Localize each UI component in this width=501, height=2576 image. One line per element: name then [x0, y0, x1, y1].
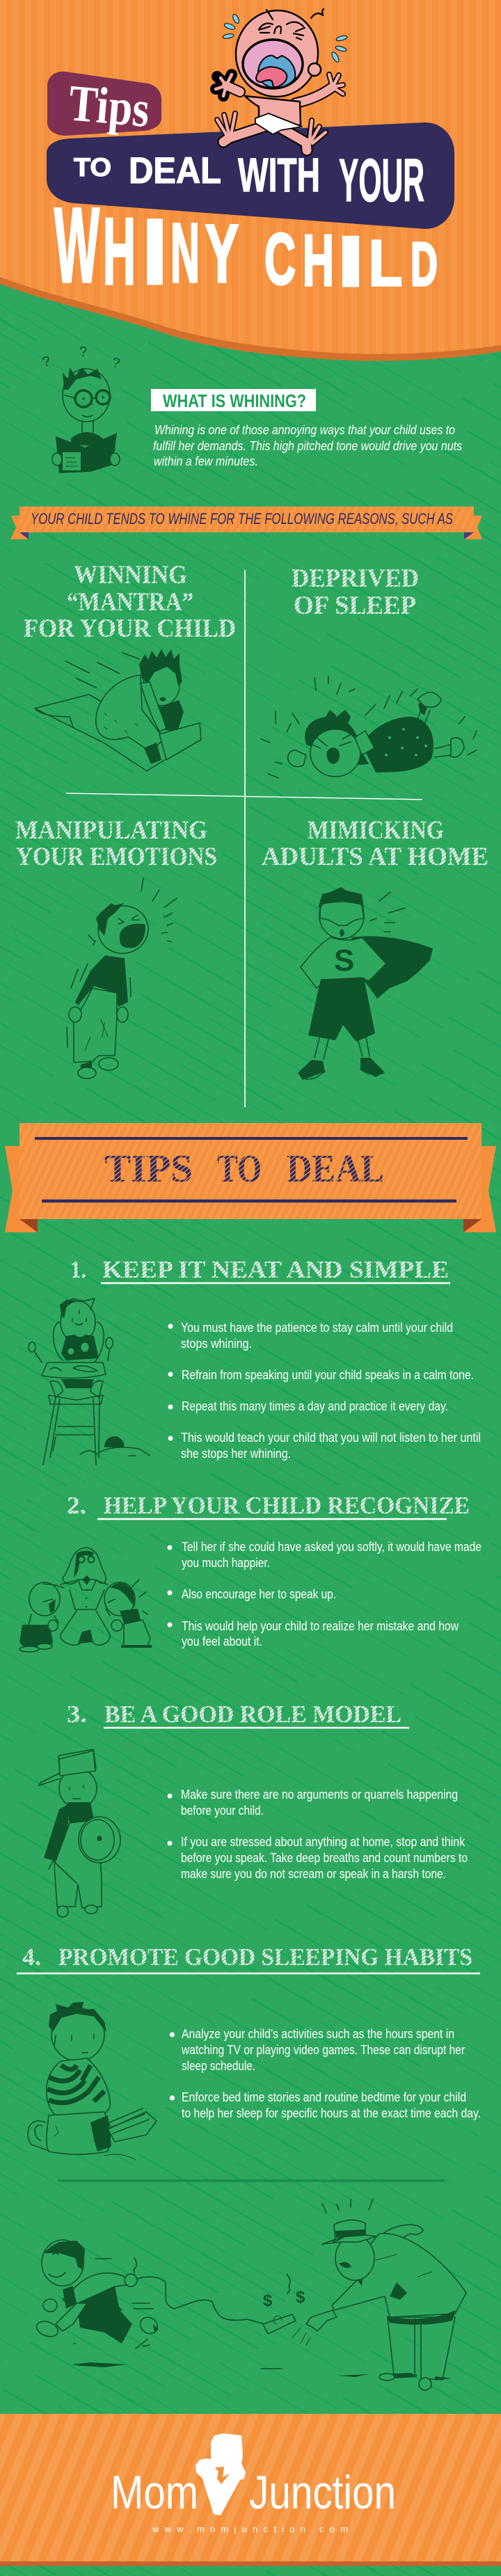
- reason 3: heading: YOUR EMOTIONS: [16, 843, 217, 871]
- right child: [104, 1582, 135, 1616]
- tip 4: bullets: watching TV or playing video games. These can disrupt her: [181, 2043, 465, 2057]
- reason 2: heading: OF SLEEP: [294, 591, 416, 620]
- legs: [223, 125, 307, 150]
- tip 1: bullets: [168, 1321, 481, 1461]
- title badge: Tips: Tips: [67, 74, 152, 138]
- footer: orange band: [0, 2414, 501, 2566]
- reason 1: heading: FOR YOUR CHILD: [24, 614, 236, 643]
- logo: MomJunction: Junction: [249, 2466, 396, 2519]
- head: [230, 5, 324, 102]
- header: orange curved panel: [0, 0, 501, 361]
- tip 4: bullets: [170, 2027, 481, 2120]
- banner: tips to deal: [5, 1123, 496, 1232]
- title banner: to deal with your: [47, 122, 454, 229]
- title banner: to deal with your: TO: [74, 153, 111, 182]
- icon: boy reading book: ?: [41, 353, 51, 370]
- tip 4: heading: PROMOTE GOOD SLEEPING HABITS: [58, 1943, 472, 1971]
- reason 1: heading: WINNING: [74, 561, 187, 589]
- ribbon: reasons: [10, 507, 482, 539]
- banner: tips to deal: TO: [217, 1147, 262, 1191]
- tip 4: bullets: Enforce bed time stories and routine bedtime for your child: [182, 2090, 466, 2104]
- icon: crying baby: [216, 5, 348, 150]
- title: whiny child: C: [264, 219, 296, 300]
- tip 4: bullets: Analyze your child’s activities such as the hours spent in: [182, 2027, 454, 2041]
- tip 4: bullets: sleep schedule.: [182, 2059, 255, 2073]
- tip 1: bullets: stops whining.: [181, 1337, 252, 1351]
- icon: running boy pulling money on a string: $: [296, 2288, 305, 2307]
- logo: MomJunction: [111, 2433, 396, 2534]
- reason 4: heading: ADULTS AT HOME: [262, 843, 488, 871]
- icon: boy reading book: ?: [79, 344, 87, 360]
- text: what is whining: fulfill her demands. This high pitched tone would drive you nuts: [153, 439, 462, 453]
- tip 2: heading: 2.: [67, 1492, 86, 1519]
- reason 1: heading: “MANTRA”: [67, 588, 193, 617]
- tip 1: heading: KEEP IT NEAT AND SIMPLE: [102, 1256, 449, 1283]
- tears: [223, 13, 348, 63]
- tip 3: heading: BE A GOOD ROLE MODEL: [104, 1701, 401, 1728]
- arms: [216, 74, 333, 103]
- text: what is whining: Whining is one of those annoying ways that your child uses to: [154, 423, 455, 437]
- banner: tips to deal: DEAL: [287, 1147, 384, 1191]
- left child: [29, 1582, 60, 1616]
- reason 4: heading: MIMICKING: [308, 816, 444, 845]
- icon: boy on potty with book: [28, 2002, 157, 2160]
- tip 3: bullets: make sure you do not scream or speak in a harsh tone.: [181, 1867, 446, 1881]
- tip 2: bullets: you feel about it.: [182, 1635, 262, 1648]
- icon: boy with toy shield and sword: [39, 1749, 120, 1917]
- icon: messy kid in high chair: [29, 1298, 150, 1465]
- banner: tips to deal: TIPS: [104, 1147, 193, 1191]
- tip 3: bullets: before your child.: [181, 1804, 264, 1818]
- title: whiny child: I: [341, 225, 360, 298]
- icon: man reaching for money: [292, 2199, 466, 2390]
- tip 2: bullets: [167, 1540, 482, 1648]
- icon: running boy pulling money on a string: $: [263, 2291, 273, 2310]
- icon: running boy pulling money on a string: [35, 2240, 305, 2369]
- title banner: to deal with your: DEAL: [129, 150, 221, 191]
- diaper: [255, 113, 302, 134]
- text: what is whining: within a few minutes.: [154, 454, 258, 468]
- tip 2: bullets: Also encourage her to speak up.: [182, 1587, 336, 1601]
- icon: mother separating two children: [19, 1548, 152, 1652]
- title: whiny child: D: [411, 230, 438, 299]
- tip 1: bullets: You must have the patience to stay calm until your child: [181, 1321, 453, 1335]
- reason 4: heading: [262, 816, 488, 871]
- title: whiny child: H: [103, 198, 136, 304]
- tip 3: bullets: If you are stressed about anything at home, stop and think: [181, 1835, 466, 1849]
- icon: boy reading book: ?: [111, 355, 121, 372]
- tip 1: bullets: she stops her whining.: [181, 1447, 291, 1461]
- title: whiny child: [54, 186, 438, 305]
- logo: MomJunction: www.momjunction.com: [152, 2524, 348, 2534]
- logo: MomJunction: Mom: [111, 2466, 198, 2519]
- reason 2: heading: [292, 564, 419, 620]
- tip 2: bullets: This would help your child to realize her mistake and how: [182, 1619, 459, 1633]
- title: whiny child: L: [369, 227, 402, 299]
- icon: girl tantrum on floor: [261, 676, 477, 778]
- icon: superhero boy: S: [334, 944, 354, 978]
- icon: screaming boy: [67, 878, 177, 1079]
- reason 3: heading: [15, 816, 217, 871]
- tip 2: heading: HELP YOUR CHILD RECOGNIZE: [104, 1492, 470, 1519]
- reason 2: heading: DEPRIVED: [292, 564, 419, 593]
- tip 4: heading: 4.: [22, 1943, 41, 1971]
- tip 3: bullets: [167, 1788, 468, 1881]
- title banner: to deal with your: WITH: [238, 148, 320, 202]
- logo silhouette: [196, 2433, 246, 2515]
- reason 3: heading: MANIPULATING: [15, 816, 207, 845]
- icon: kid dragging blanket: [35, 649, 201, 771]
- torso: [245, 96, 301, 125]
- tip 3: bullets: Make sure there are no arguments or quarrels happening: [181, 1788, 458, 1802]
- what is whining heading: WHAT IS WHINING?: [163, 390, 306, 411]
- title: whiny child: W: [54, 186, 100, 305]
- icon: superhero boy: [298, 887, 433, 1080]
- reason 1: heading: [24, 561, 236, 643]
- tip 1: bullets: Repeat this many times a day and practice it every day.: [182, 1399, 448, 1413]
- title: whiny child: N: [170, 205, 200, 300]
- title: whiny child: Y: [205, 208, 239, 300]
- text: what is whining: [153, 423, 462, 468]
- tip 2: bullets: you much happier.: [182, 1556, 270, 1570]
- title: whiny child: H: [303, 221, 334, 301]
- icon: boy reading book: [41, 344, 121, 473]
- tip 3: heading: 3.: [67, 1701, 87, 1728]
- title: whiny child: I: [145, 204, 165, 301]
- tip 1: heading: 1.: [70, 1256, 86, 1283]
